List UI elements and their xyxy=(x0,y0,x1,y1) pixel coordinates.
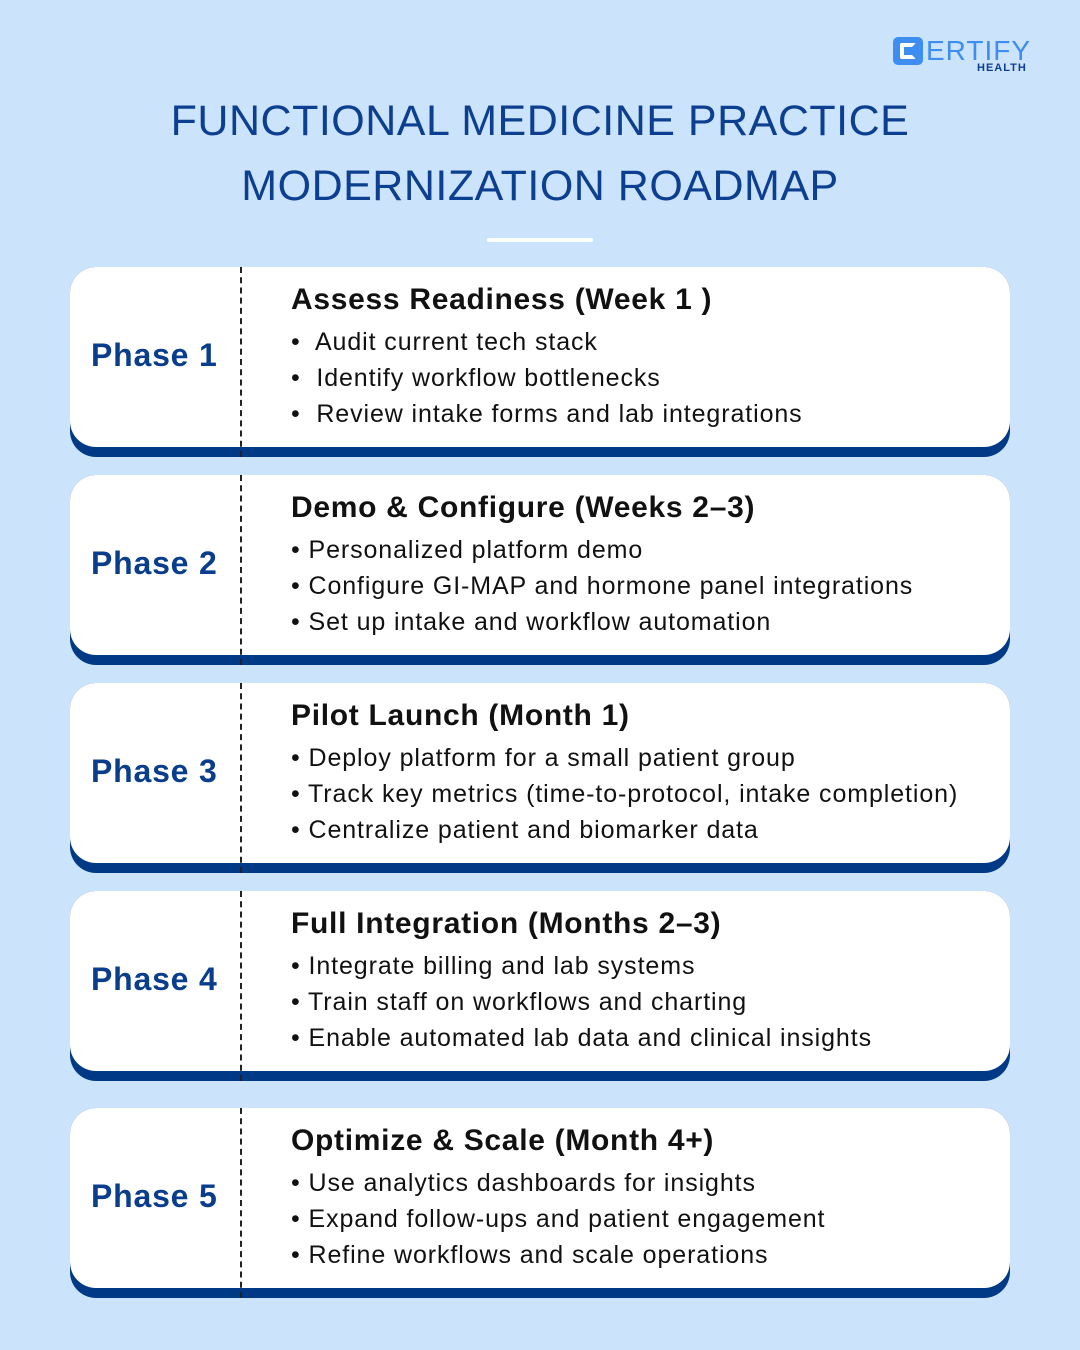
panel: phase 2: • Configure GI-MAP and hormone panel integrations xyxy=(291,572,913,600)
panel: phase 3: • Deploy platform for a small patient group xyxy=(291,744,796,772)
panel: phase 3: Pilot Launch (Month 1) xyxy=(291,699,630,732)
panel: phase 2: Phase 2 xyxy=(91,545,218,581)
panel: phase 4: Full Integration (Months 2–3) xyxy=(291,907,721,940)
panel: phase 4: Phase 4 xyxy=(91,961,218,997)
panel: phase 5 xyxy=(70,1108,1010,1298)
panel: phase 1: • Review intake forms and lab integrations xyxy=(291,400,803,428)
panel: phase 1: • Identify workflow bottlenecks xyxy=(291,364,661,392)
title xyxy=(171,97,909,210)
panel: phase 1 xyxy=(70,267,1010,457)
panel: phase 2 xyxy=(70,475,1010,665)
panel: phase 4: • Integrate billing and lab systems xyxy=(291,952,695,980)
panel: phase 3: • Track key metrics (time-to-protocol, intake completion) xyxy=(291,780,958,808)
title: FUNCTIONAL MEDICINE PRACTICE xyxy=(171,97,909,145)
title: MODERNIZATION ROADMAP xyxy=(241,162,839,210)
panel: phase 2: • Set up intake and workflow automation xyxy=(291,608,771,636)
panel: phase 2: Demo & Configure (Weeks 2–3) xyxy=(291,491,755,524)
panel: phase 4 xyxy=(70,891,1010,1081)
panel: phase 3: Phase 3 xyxy=(91,753,218,789)
panel: phase 5: Optimize & Scale (Month 4+) xyxy=(291,1124,714,1157)
logo: ERTIFY xyxy=(926,35,1031,66)
panel: phase 5: • Use analytics dashboards for insights xyxy=(291,1169,756,1197)
panel: phase 5: Phase 5 xyxy=(91,1178,218,1214)
panel: phase 3: • Centralize patient and biomarker data xyxy=(291,816,759,844)
panel: phase 4: • Enable automated lab data and clinical insights xyxy=(291,1024,872,1052)
panel: phase 5: • Expand follow-ups and patient engagement xyxy=(291,1205,825,1233)
panel: phase 4: • Train staff on workflows and charting xyxy=(291,988,747,1016)
panel: phase 5: • Refine workflows and scale operations xyxy=(291,1241,768,1269)
panel: phase 1: • Audit current tech stack xyxy=(291,328,598,356)
panel: phase 1: Phase 1 xyxy=(91,337,218,373)
panel: phase 2: • Personalized platform demo xyxy=(291,536,643,564)
panel: phase 3 xyxy=(70,683,1010,873)
logo: HEALTH xyxy=(977,62,1027,74)
logo xyxy=(893,35,1031,74)
panel: phase 1: Assess Readiness (Week 1 ) xyxy=(291,283,712,316)
